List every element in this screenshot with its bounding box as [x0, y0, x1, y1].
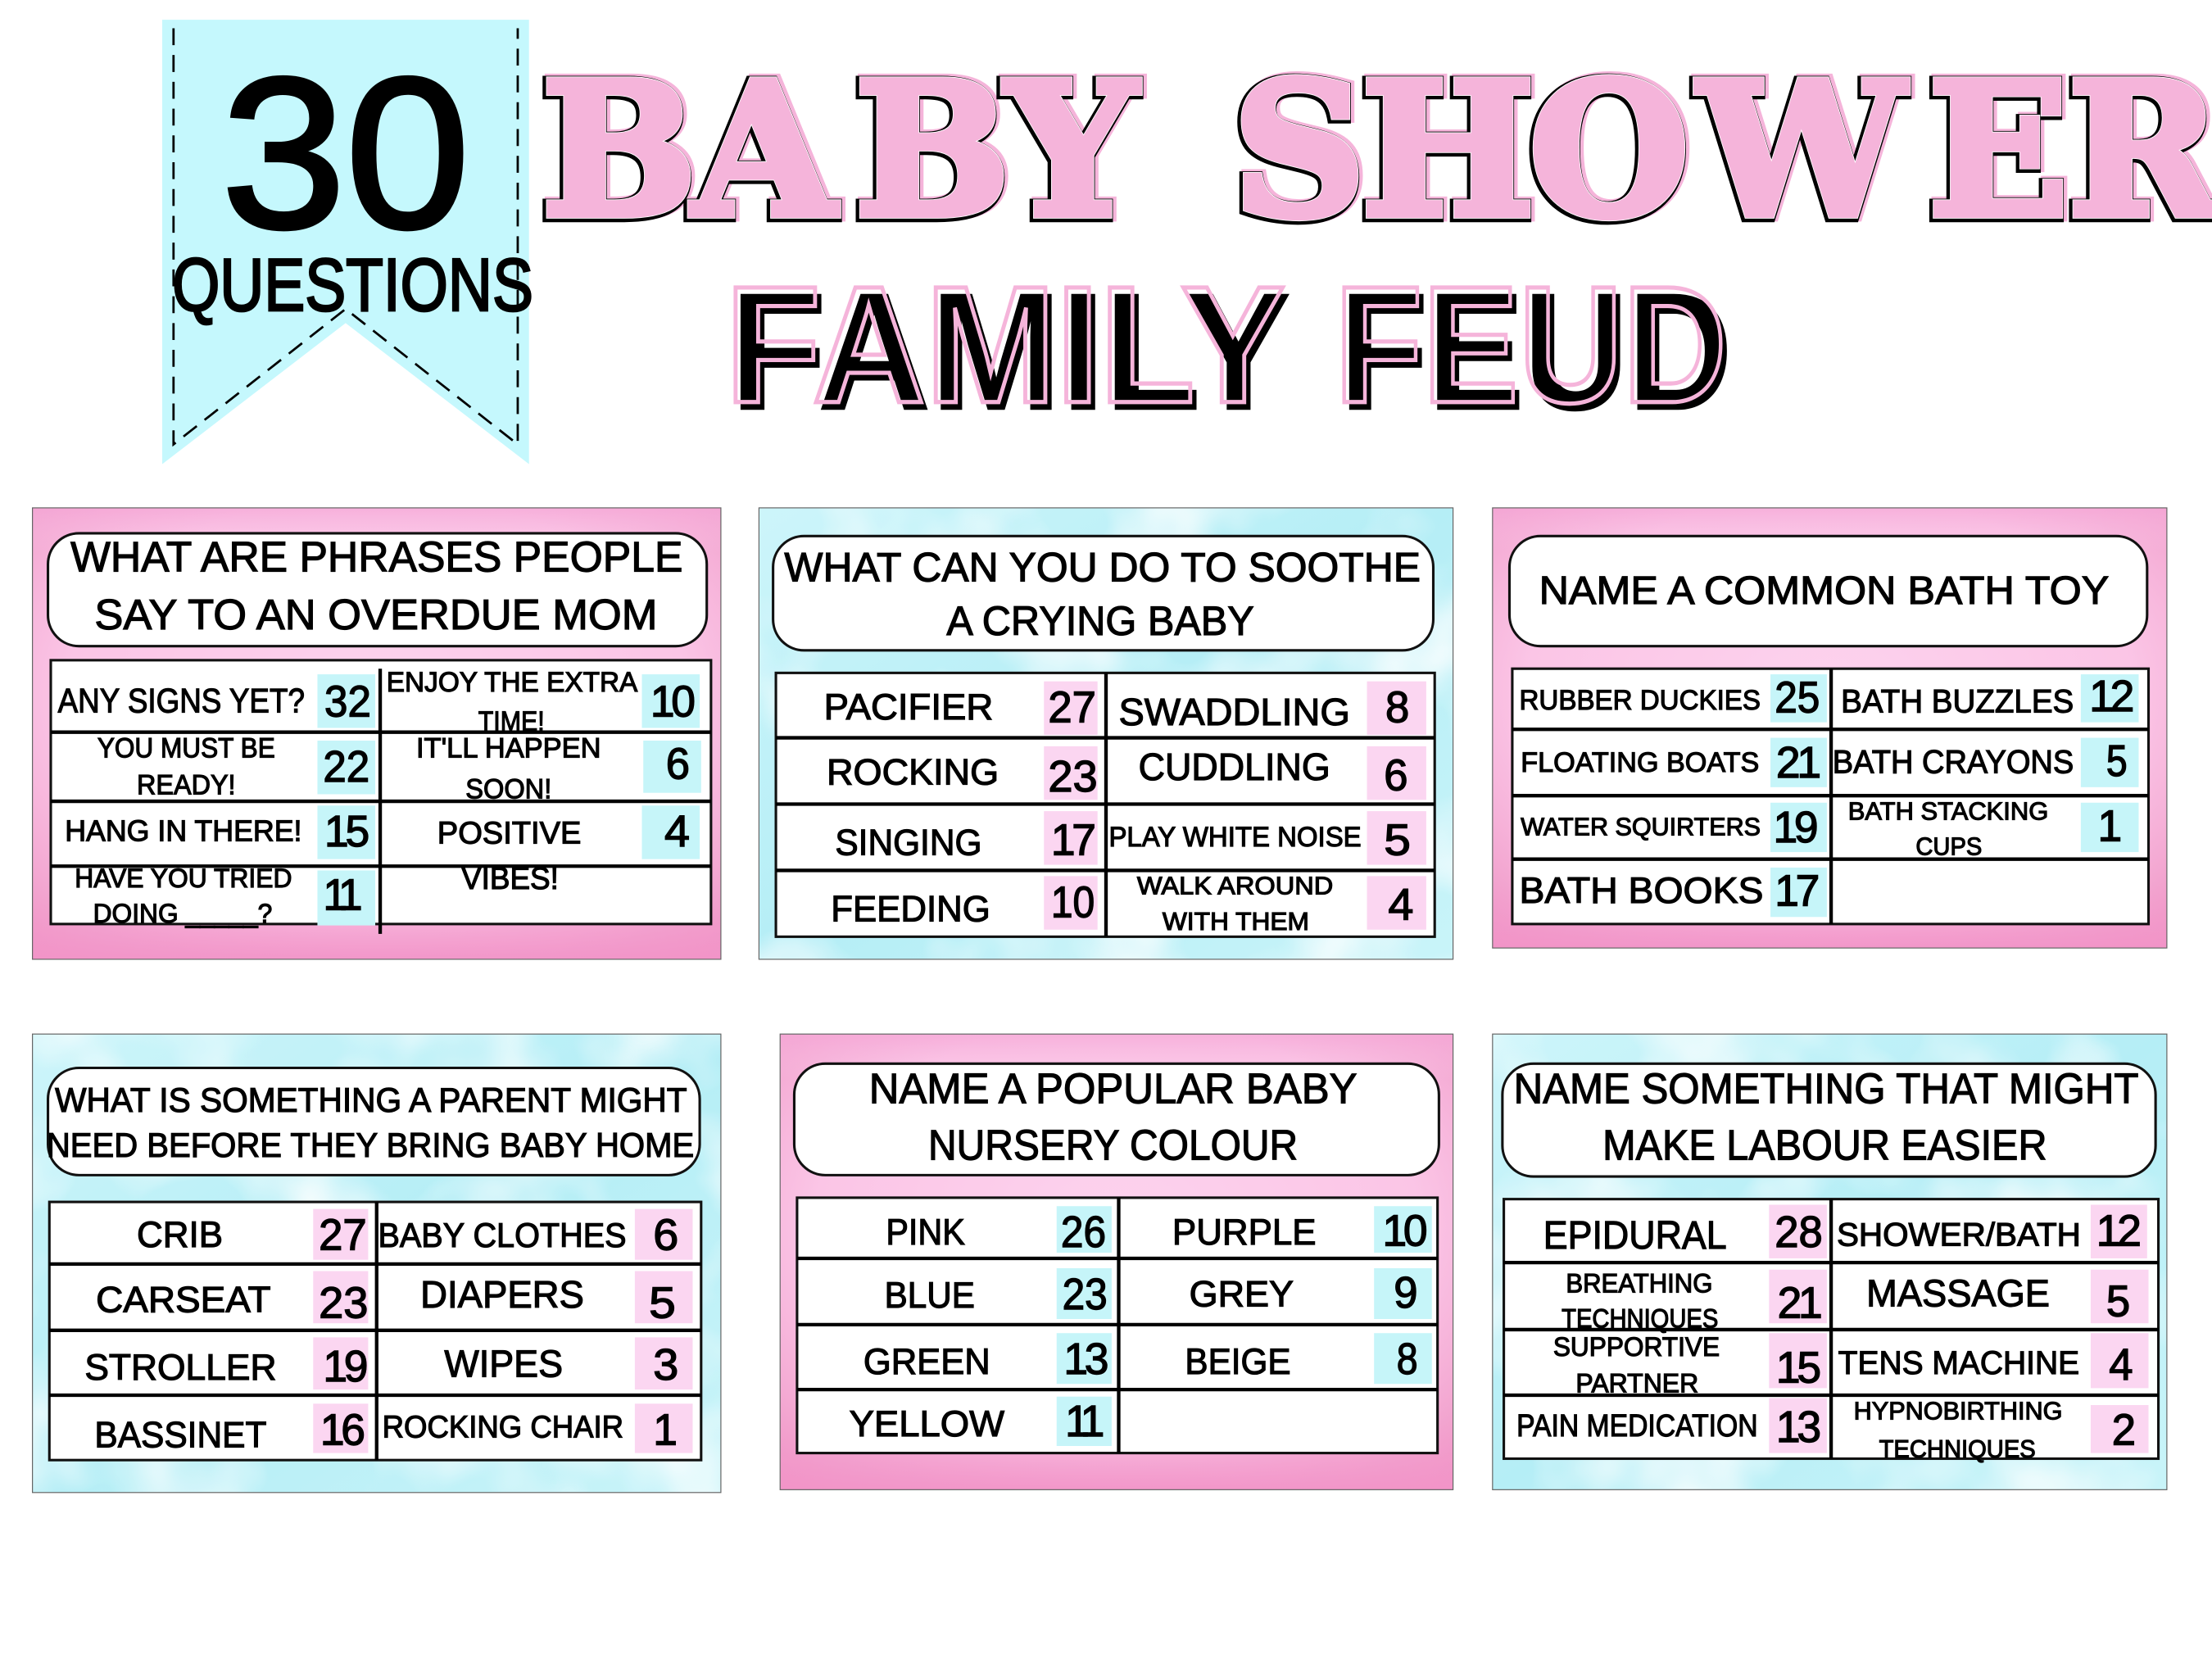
answer: singing — [835, 811, 1098, 865]
answer: walk around with them: 4 — [1388, 882, 1413, 930]
answer: baby clothes — [378, 1209, 692, 1260]
answer: bath books: BATH BOOKS — [1520, 870, 1763, 911]
answer: swaddling: SWADDLING — [1118, 691, 1350, 733]
answer: epidural: EPIDURAL — [1543, 1213, 1727, 1258]
answer: rocking: 23 — [1048, 753, 1098, 801]
answer: bath stacking cups: BATH STACKING — [1848, 796, 2048, 825]
answer: grey: GREY — [1190, 1274, 1294, 1315]
answer: play white noise: 5 — [1384, 816, 1411, 864]
panel: soothe a crying baby question — [759, 508, 1453, 959]
question heading — [773, 536, 1433, 650]
panel: nursery colour question — [780, 1034, 1453, 1489]
answer: hypnobirthing techniques: TECHNIQUES — [1879, 1435, 2036, 1463]
answer: pink — [886, 1206, 1112, 1257]
answer: you must be ready: 22 — [323, 743, 369, 791]
answer: yellow: 11 — [1065, 1398, 1104, 1446]
answer: wipes — [444, 1337, 692, 1389]
answer: walk around with them: WALK AROUND — [1137, 872, 1333, 900]
answer: bath crayons — [1833, 737, 2138, 787]
answer: green — [863, 1333, 1112, 1384]
answer: breathing techniques: TECHNIQUES — [1562, 1303, 1718, 1333]
answer: green: 13 — [1063, 1335, 1108, 1384]
answer table — [51, 660, 711, 934]
answer: pacifier — [824, 682, 1098, 735]
ribbon banner: 30 questions: QUESTIONS — [172, 243, 533, 327]
answer: enjoy the extra time: ENJOY THE EXTRA — [387, 667, 637, 698]
answer: beige: BEIGE — [1185, 1341, 1291, 1382]
answer: pink: PINK — [886, 1212, 965, 1253]
answer: bath books — [1520, 867, 1827, 917]
answer: purple: 10 — [1383, 1207, 1428, 1255]
question heading: NAME A COMMON BATH TOY — [1539, 569, 2109, 613]
answer: bath books: 17 — [1775, 867, 1820, 915]
answer: grey — [1190, 1268, 1432, 1319]
answer: pain medication: 13 — [1776, 1403, 1821, 1452]
answer: stroller — [84, 1337, 368, 1391]
answer: purple — [1172, 1206, 1432, 1255]
answer: supportive partner: SUPPORTIVE — [1553, 1331, 1720, 1362]
answer: cuddling — [1139, 746, 1426, 800]
answer: purple: PURPLE — [1172, 1212, 1317, 1253]
answer: massage: MASSAGE — [1866, 1272, 2050, 1315]
panel: before bringing baby home question — [33, 1034, 721, 1493]
answer: pain medication: PAIN MEDICATION — [1516, 1409, 1758, 1444]
answer table — [49, 1202, 701, 1460]
answer: walk around with them — [1137, 872, 1426, 936]
answer: blue: 23 — [1063, 1271, 1108, 1319]
question heading: A CRYING BABY — [946, 598, 1254, 644]
title: BABY SHOWER: SHOWER — [1231, 43, 2212, 259]
answer: play white noise — [1108, 811, 1426, 865]
answer: positive vibes — [437, 805, 700, 896]
title: FAMILY FEUD: FAMILY — [725, 252, 1285, 438]
answer: swaddling — [1118, 682, 1426, 735]
title: FAMILY FEUD: FEUD — [1335, 252, 1727, 438]
answer: rubber duckies: 25 — [1775, 674, 1820, 723]
title: BABY SHOWER — [541, 43, 2212, 259]
panel: easier labour question — [1493, 1034, 2167, 1489]
answer: walk around with them: WITH THEM — [1163, 907, 1309, 936]
answer: rocking chair — [383, 1403, 692, 1454]
answer: diapers — [420, 1271, 692, 1327]
answer: blue — [885, 1268, 1112, 1319]
answer: rocking chair: 1 — [653, 1406, 678, 1454]
answer: pacifier: PACIFIER — [824, 687, 993, 728]
answer: massage: 5 — [2106, 1278, 2130, 1326]
ribbon banner: 30 questions — [162, 20, 533, 465]
answer: floating boats: FLOATING BOATS — [1521, 747, 1759, 778]
answer: swaddling: 8 — [1385, 684, 1409, 732]
answer: bath crayons: 5 — [2106, 737, 2128, 786]
answer: breathing techniques: 21 — [1778, 1279, 1823, 1327]
answer: crib — [137, 1209, 368, 1260]
answer: water squirters: 19 — [1773, 804, 1819, 852]
answer: tens machine: 4 — [2109, 1341, 2133, 1389]
answer: yellow — [850, 1397, 1112, 1446]
answer: floating boats — [1521, 738, 1827, 787]
answer: hang in there: HANG IN THERE! — [65, 814, 301, 847]
question heading — [47, 1068, 700, 1175]
answer: hang in there: 15 — [324, 808, 369, 856]
answer: grey: 9 — [1394, 1269, 1418, 1317]
answer: bath crayons: BATH CRAYONS — [1833, 745, 2074, 781]
question heading: SAY TO AN OVERDUE MOM — [94, 591, 657, 638]
title: BABY SHOWER: BABY — [541, 43, 1137, 259]
answer: play white noise: PLAY WHITE NOISE — [1108, 822, 1362, 853]
answer table — [776, 673, 1435, 936]
answer: bath buzzles: BATH BUZZLES — [1841, 684, 2074, 720]
question heading: NEED BEFORE THEY BRING BABY HOME — [47, 1126, 694, 1164]
question heading — [1503, 1063, 2155, 1176]
answer: diapers: 5 — [649, 1279, 676, 1327]
answer: epidural: 28 — [1775, 1208, 1823, 1257]
title: BABY SHOWER: SHOWER — [1235, 43, 2212, 258]
answer: wipes: 3 — [653, 1341, 678, 1389]
answer: water squirters — [1521, 803, 1827, 852]
answer: carseat: CARSEAT — [96, 1279, 271, 1320]
answer: pain medication — [1516, 1398, 1827, 1453]
question heading: NURSERY COLOUR — [928, 1121, 1298, 1168]
title: BABY SHOWER: BABY — [542, 43, 1139, 258]
answer: crib: CRIB — [137, 1214, 223, 1255]
answer: have you tried doing: 11 — [323, 872, 363, 920]
answer: it'll happen soon — [416, 733, 701, 805]
question heading: NAME SOMETHING THAT MIGHT — [1514, 1065, 2138, 1113]
answer: yellow: YELLOW — [850, 1403, 1005, 1444]
answer: enjoy the extra time: 10 — [650, 678, 696, 727]
answer: it'll happen soon: SOON! — [465, 774, 551, 805]
answer: shower or bath — [1837, 1205, 2147, 1258]
answer: rocking chair: ROCKING CHAIR — [383, 1411, 623, 1445]
answer: stroller: 19 — [323, 1343, 368, 1391]
answer: rocking — [827, 746, 1098, 801]
answer: positive vibes: 4 — [664, 808, 690, 856]
answer: have you tried doing: HAVE YOU TRIED — [75, 863, 292, 893]
question heading — [1509, 536, 2147, 646]
answer: feeding: 10 — [1051, 878, 1095, 927]
panel: overdue mom question — [33, 508, 721, 959]
answer: shower or bath: 12 — [2096, 1207, 2142, 1255]
title: BABY SHOWER: BABY — [542, 43, 1139, 258]
answer: you must be ready — [97, 733, 375, 800]
ribbon banner: 30 questions: 30 — [221, 34, 469, 273]
answer: cuddling: 6 — [1384, 751, 1407, 800]
answer: bassinet: BASSINET — [94, 1415, 266, 1456]
answer: enjoy the extra time: TIME! — [478, 706, 545, 737]
answer: rubber duckies — [1520, 674, 1827, 723]
answer: stroller: STROLLER — [84, 1347, 277, 1388]
answer: any signs yet: 32 — [324, 678, 371, 727]
answer: epidural — [1543, 1205, 1827, 1258]
answer: feeding: FEEDING — [831, 888, 990, 929]
answer: supportive partner — [1553, 1331, 1827, 1398]
answer: baby clothes: BABY CLOTHES — [378, 1217, 627, 1254]
answer: supportive partner: 15 — [1776, 1344, 1821, 1392]
answer: you must be ready: READY! — [137, 769, 236, 800]
title: BABY SHOWER: SHOWER — [1233, 43, 2212, 258]
title: FAMILY FEUD: FAMILY — [731, 259, 1291, 445]
answer: bath buzzles: 12 — [2089, 673, 2134, 721]
answer: baby clothes: 6 — [653, 1212, 678, 1260]
answer: beige: 8 — [1397, 1335, 1418, 1384]
answer: green: GREEN — [863, 1341, 990, 1382]
answer: breathing techniques — [1562, 1267, 1827, 1333]
answer: singing: SINGING — [835, 822, 981, 863]
answer: breathing techniques: BREATHING — [1566, 1267, 1712, 1298]
answer: water squirters: WATER SQUIRTERS — [1521, 812, 1761, 841]
title: FAMILY FEUD: FEUD — [1340, 259, 1733, 445]
answer: hypnobirthing techniques: 2 — [2112, 1406, 2136, 1454]
answer: diapers: DIAPERS — [420, 1273, 584, 1316]
answer: bath stacking cups: CUPS — [1915, 832, 1982, 860]
question heading — [794, 1063, 1439, 1175]
answer: beige — [1185, 1333, 1432, 1384]
answer: any signs yet: ANY SIGNS YET? — [58, 682, 305, 720]
answer table — [1504, 1199, 2159, 1463]
answer: singing: 17 — [1051, 816, 1096, 864]
answer: supportive partner: PARTNER — [1575, 1368, 1698, 1398]
question heading: NAME A POPULAR BABY — [869, 1065, 1358, 1113]
answer: it'll happen soon: 6 — [666, 741, 690, 789]
answer: have you tried doing: DOING _____? — [93, 898, 272, 928]
answer: bath stacking cups — [1848, 796, 2138, 860]
answer: bath buzzles — [1841, 673, 2138, 723]
answer: wipes: WIPES — [444, 1343, 563, 1385]
answer: massage — [1866, 1270, 2149, 1326]
question heading: WHAT ARE PHRASES PEOPLE — [70, 533, 682, 580]
answer: tens machine: TENS MACHINE — [1838, 1345, 2079, 1381]
answer: crib: 27 — [319, 1212, 367, 1260]
answer: blue: BLUE — [885, 1275, 975, 1316]
answer: feeding — [831, 876, 1098, 930]
title: BABY SHOWER: SHOWER — [1233, 43, 2212, 258]
answer: hypnobirthing techniques: HYPNOBIRTHING — [1854, 1396, 2062, 1425]
panel: common bath toy question — [1493, 508, 2167, 948]
answer: pacifier: 27 — [1048, 684, 1096, 732]
answer: tens machine — [1838, 1333, 2149, 1389]
answer: bassinet: 16 — [320, 1406, 365, 1454]
answer: carseat: 23 — [319, 1279, 368, 1327]
question heading: WHAT CAN YOU DO TO SOOTHE — [784, 544, 1421, 590]
answer: cuddling: CUDDLING — [1139, 746, 1330, 788]
answer: floating boats: 21 — [1776, 739, 1821, 787]
answer table — [797, 1198, 1438, 1453]
answer: bassinet — [94, 1403, 368, 1456]
answer: hypnobirthing techniques — [1854, 1396, 2149, 1463]
answer: rubber duckies: RUBBER DUCKIES — [1520, 685, 1761, 716]
answer: any signs yet — [58, 674, 375, 728]
answer: positive vibes: VIBES! — [461, 862, 559, 896]
title: BABY SHOWER: BABY — [543, 43, 1140, 258]
question heading: MAKE LABOUR EASIER — [1602, 1121, 2047, 1168]
answer: carseat — [96, 1271, 368, 1327]
title: FAMILY FEUD — [725, 252, 1733, 445]
answer: pink: 26 — [1061, 1208, 1106, 1257]
answer: have you tried doing — [75, 863, 375, 928]
answer: positive vibes: POSITIVE — [437, 817, 581, 851]
answer: enjoy the extra time — [387, 667, 700, 737]
answer: rocking: ROCKING — [827, 751, 999, 792]
answer: hang in there — [65, 805, 375, 859]
question heading: WHAT IS SOMETHING A PARENT MIGHT — [55, 1081, 687, 1119]
answer: it'll happen soon: IT'LL HAPPEN — [416, 733, 601, 764]
answer: you must be ready: YOU MUST BE — [97, 733, 275, 764]
answer table — [1512, 669, 2149, 924]
answer: shower or bath: SHOWER/BATH — [1837, 1217, 2081, 1253]
answer: bath stacking cups: 1 — [2098, 802, 2122, 850]
question heading — [48, 533, 707, 646]
